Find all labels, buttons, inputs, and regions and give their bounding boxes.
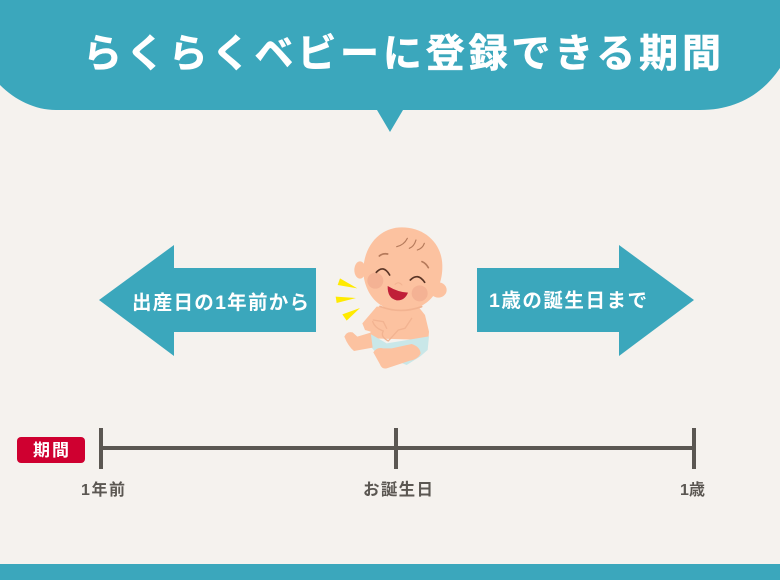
left arrow label: 出産日の1年前から: [132, 291, 309, 314]
period badge: 期間: [33, 441, 69, 460]
chin shading: [380, 306, 422, 310]
title: らくらくベビーに登録できる期間: [83, 33, 721, 76]
left arrow: [99, 245, 316, 356]
laugh marks: [336, 278, 360, 321]
baby right leg: [373, 344, 421, 368]
footer bar: [0, 564, 780, 580]
baby head: [363, 227, 442, 311]
right arrow: [477, 245, 694, 356]
header speech bubble: [0, 0, 780, 132]
cheeks: [367, 273, 383, 289]
icon: laughing baby: [336, 227, 447, 368]
baby arms and chest shading: [373, 318, 412, 341]
eyebrows: [379, 254, 428, 268]
timeline: [99, 428, 696, 469]
eyes: [376, 269, 425, 282]
baby body: [362, 307, 429, 340]
timeline label: birth date: お誕生日: [363, 480, 433, 499]
mouth: [388, 286, 408, 300]
right arrow label: 1歳の誕生日まで: [489, 289, 647, 312]
hair: [397, 238, 424, 250]
nose: [395, 283, 402, 285]
baby ears: [354, 261, 447, 298]
diaper: [369, 333, 429, 365]
timeline label: age one: 1歳: [680, 481, 705, 499]
period badge: [17, 437, 85, 463]
timeline label: 1 year before: 1年前: [81, 480, 125, 499]
baby left leg: [344, 332, 373, 351]
